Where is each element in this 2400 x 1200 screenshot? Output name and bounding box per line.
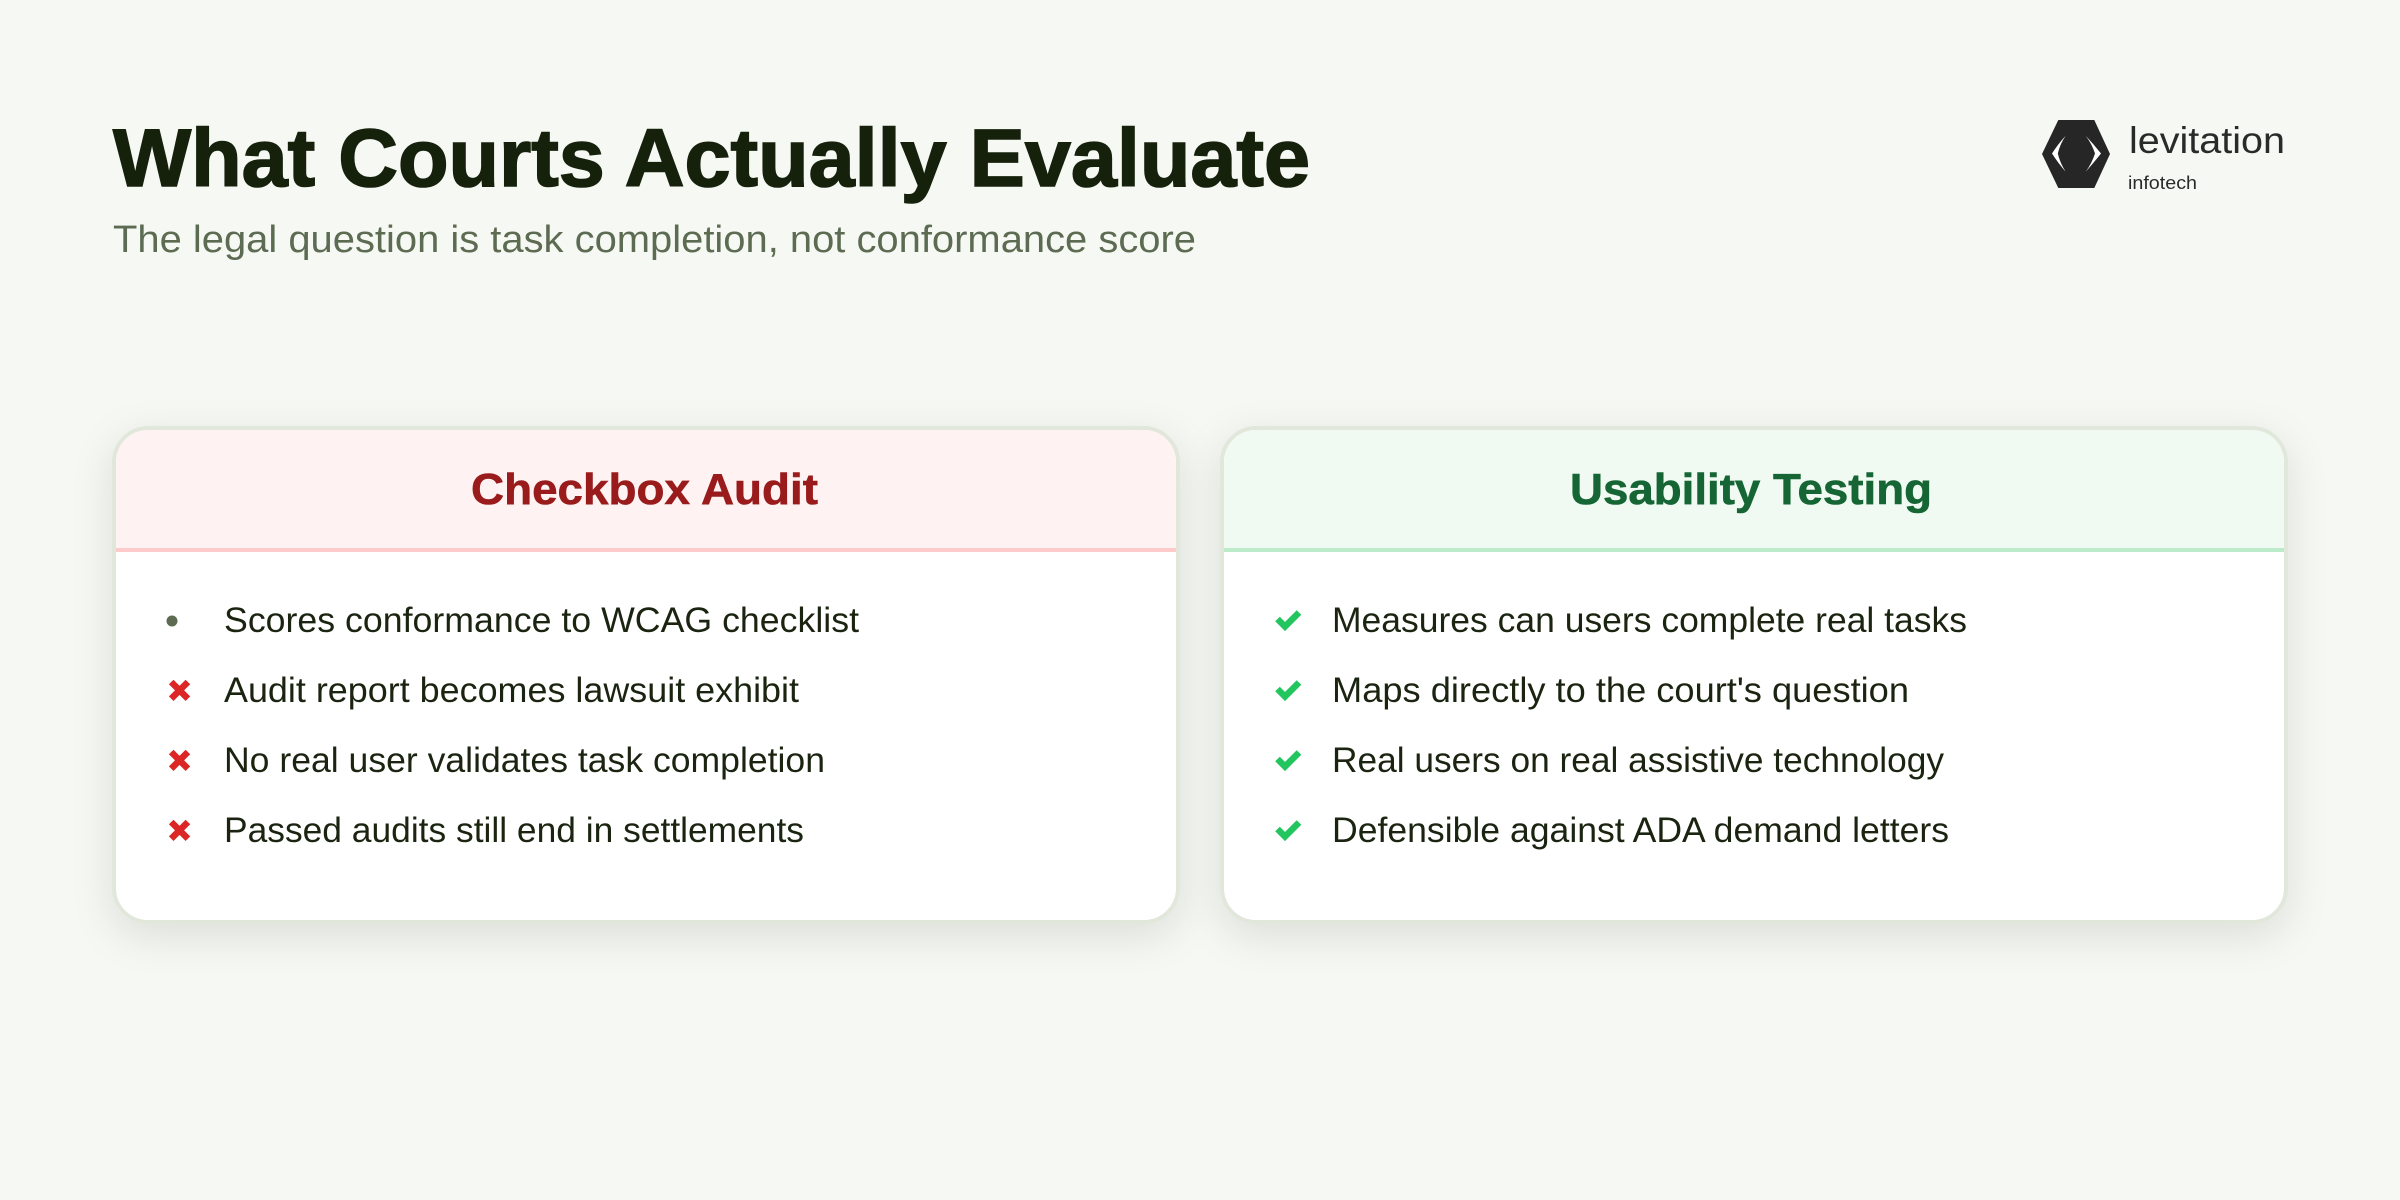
subtitle: The legal question is task completion, not conformance score bbox=[113, 219, 1196, 261]
list row: real users: Real users on real assistive technology bbox=[1332, 741, 1944, 780]
list row: no real user: No real user validates task completion bbox=[224, 741, 825, 780]
panel heading: usability testing: Usability Testing bbox=[1570, 465, 1932, 514]
panel: checkbox audit bbox=[114, 428, 1178, 922]
list row: scores conformance: Scores conformance to WCAG checklist bbox=[224, 601, 859, 640]
icon: hexagon logo mark bbox=[2042, 120, 2110, 188]
logo: levitation infotech bbox=[2042, 120, 2285, 193]
list row: audit report: Audit report becomes lawsuit exhibit bbox=[224, 671, 799, 710]
list row: defensible: Defensible against ADA demand letters bbox=[1332, 811, 1949, 850]
logo subtext: infotech bbox=[2128, 173, 2197, 193]
title: What Courts Actually Evaluate bbox=[113, 113, 1310, 204]
list row: passed audits: Passed audits still end in settlements bbox=[224, 811, 804, 850]
logo wordmark: levitation bbox=[2129, 120, 2285, 161]
list row: maps directly: Maps directly to the court's question bbox=[1332, 671, 1909, 710]
panel heading: checkbox audit: Checkbox Audit bbox=[471, 465, 818, 514]
panel: usability testing bbox=[1222, 428, 2286, 922]
list row: measures: Measures can users complete real tasks bbox=[1332, 601, 1967, 640]
